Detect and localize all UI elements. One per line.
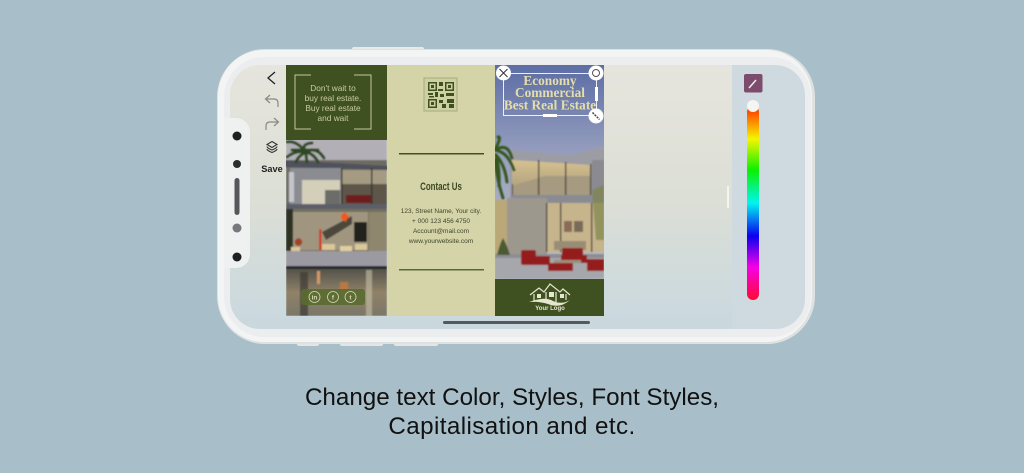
contact heading: Contact Us: [420, 181, 462, 193]
contact details: 123, Street Name, Your city.: [401, 208, 481, 215]
caption: Change text Color, Styles, Font Styles,: [305, 384, 719, 411]
icon: house logo: [530, 284, 570, 302]
red sofas: [521, 248, 604, 271]
icon: redo: [266, 118, 278, 130]
slider handle: [747, 100, 759, 112]
palm: [495, 137, 514, 198]
home indicator: [443, 321, 590, 324]
quote bracket: [295, 75, 371, 129]
caption: Capitalisation and etc.: [388, 413, 636, 440]
camera notch: [224, 118, 250, 268]
color picker: [744, 74, 762, 300]
social bar: f: [332, 294, 335, 302]
icon: rotate: [588, 66, 604, 80]
icon: undo: [266, 95, 278, 107]
quote text: Buy real estate: [305, 103, 361, 113]
quote text: Don't wait to: [310, 83, 356, 93]
text selection box: [496, 66, 604, 124]
brochure panel: middle: [387, 65, 495, 316]
brochure panel: left: [284, 65, 389, 316]
screen right handle: [727, 186, 729, 208]
phone body: [217, 47, 815, 346]
divider bottom: [399, 269, 484, 270]
icon: layers: [267, 142, 277, 152]
contact details: www.yourwebsite.com: [408, 238, 473, 245]
icon: eyedropper: [744, 74, 762, 92]
icon: back: [268, 72, 275, 84]
social bar: in: [312, 294, 317, 302]
contact details: Account@mail.com: [413, 228, 469, 235]
rainbow slider: [747, 106, 759, 300]
infographic canvas: [217, 47, 815, 439]
icon: close: [496, 66, 511, 80]
headline: Commercial: [515, 85, 585, 100]
icon: resize: [588, 108, 604, 124]
contact details: + 000 123 456 4750: [412, 218, 470, 225]
quote text: buy real estate.: [305, 93, 361, 103]
brochure panel: right: [495, 65, 606, 316]
palm: [287, 142, 324, 162]
social bar: [301, 289, 365, 305]
quote text: and wait: [318, 113, 349, 123]
logo footer: [495, 279, 604, 316]
phone screen: [230, 65, 805, 329]
headline: Economy: [523, 73, 577, 88]
house photo: [284, 138, 389, 316]
save label: Save: [261, 164, 283, 174]
headline: Best Real Estate: [504, 98, 596, 112]
divider top: [399, 153, 484, 154]
house photo: [495, 137, 606, 279]
toolbar: [261, 72, 283, 174]
QR code: [424, 78, 457, 111]
logo text: Your Logo: [535, 306, 565, 312]
social bar: t: [349, 294, 352, 302]
